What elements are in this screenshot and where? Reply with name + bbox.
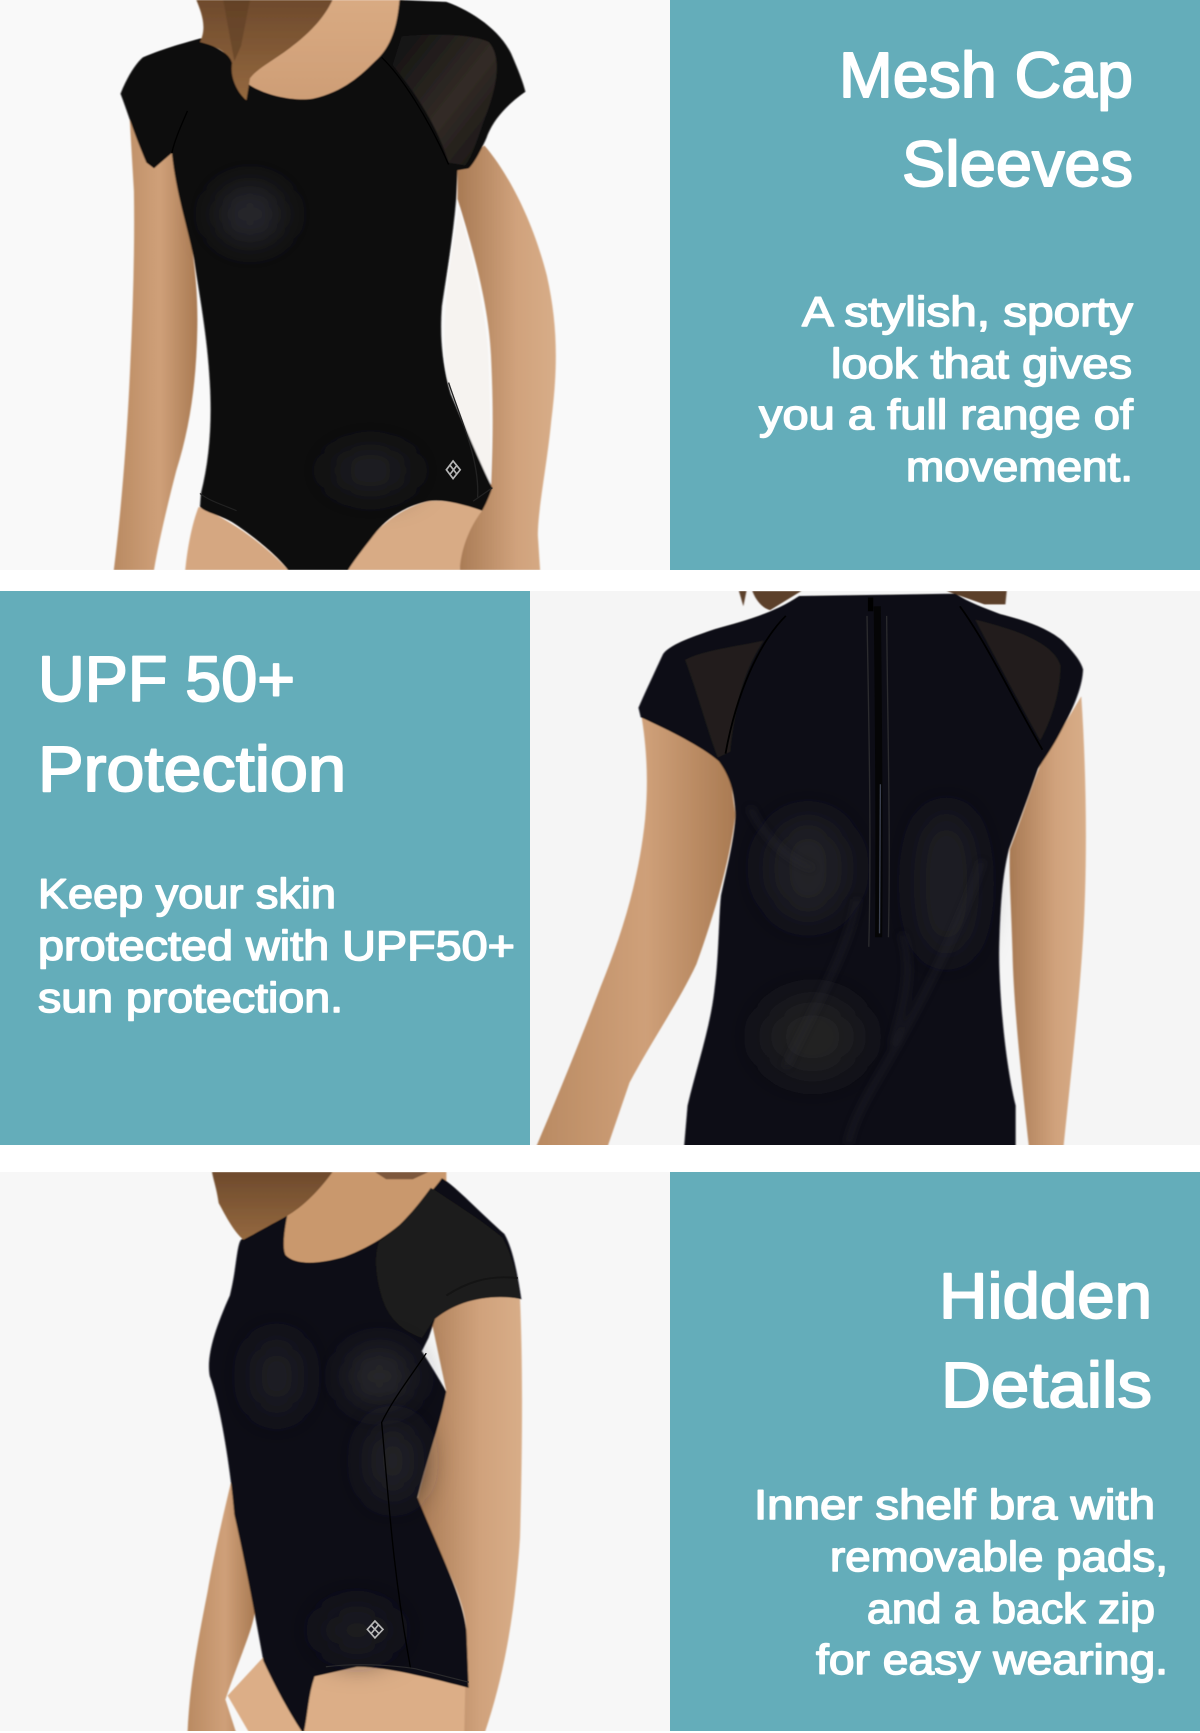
photo: side view of swimsuit <box>186 1172 524 1731</box>
description: Inner shelf bra with <box>754 1481 1155 1528</box>
photo: front view of swimsuit <box>112 0 558 570</box>
panel: UPF 50+ protection <box>0 591 530 1145</box>
left arm <box>536 712 735 1148</box>
description: look that gives <box>831 340 1132 387</box>
description: removable pads, <box>830 1533 1168 1580</box>
heading: Details <box>941 1349 1152 1421</box>
chest skin <box>219 0 404 115</box>
heading: Sleeves <box>902 128 1133 200</box>
swimsuit body <box>121 0 525 570</box>
description <box>754 1481 1168 1683</box>
hair <box>196 0 333 100</box>
thighs <box>185 507 288 570</box>
heading <box>939 1260 1152 1421</box>
hair <box>212 1172 333 1240</box>
description <box>759 288 1133 490</box>
panel background <box>670 1172 1200 1731</box>
back zip <box>867 598 889 947</box>
fabric highlights <box>763 807 973 1079</box>
heading: UPF 50+ <box>38 643 295 715</box>
right arm <box>1010 696 1086 1148</box>
heading <box>839 39 1133 200</box>
heading: Hidden <box>939 1260 1152 1332</box>
panel: mesh cap sleeves <box>670 0 1200 570</box>
mesh sleeve <box>393 35 497 165</box>
description <box>38 870 515 1021</box>
description: movement. <box>906 443 1133 490</box>
description: for easy wearing. <box>816 1636 1168 1683</box>
description: sun protection. <box>38 974 343 1021</box>
thigh <box>228 1657 478 1733</box>
seam lines and hem <box>172 57 492 511</box>
description: you a full range of <box>759 391 1133 438</box>
right arm and hand <box>458 145 556 570</box>
description: protected with UPF50+ <box>38 922 515 969</box>
logo diamond <box>367 1621 383 1638</box>
front arm <box>417 1295 522 1733</box>
logo diamond <box>446 461 460 479</box>
heading <box>38 643 346 805</box>
panel background <box>670 0 1200 570</box>
hair <box>739 591 1007 610</box>
mesh sleeve <box>376 1188 520 1338</box>
description: Keep your skin <box>38 870 336 917</box>
fabric folds <box>750 807 982 1144</box>
left mesh panel <box>685 641 763 757</box>
panel: hidden details <box>670 1172 1200 1731</box>
description: and a back zip <box>867 1585 1155 1632</box>
fabric highlights <box>254 1334 415 1657</box>
heading: Protection <box>38 733 346 805</box>
left arm <box>114 115 197 570</box>
fabric highlights <box>219 184 411 493</box>
swimsuit body <box>209 1178 521 1733</box>
seam lines <box>326 1277 518 1682</box>
description: A stylish, sporty <box>802 288 1133 335</box>
swimsuit back <box>638 594 1083 1148</box>
gap between body and right arm <box>444 207 491 486</box>
photo: back view with zip <box>530 591 1200 1145</box>
right mesh panel <box>975 620 1060 740</box>
neck and chest skin <box>272 1172 446 1276</box>
raglan seams <box>726 606 1042 754</box>
rear arm and hand <box>187 1469 255 1733</box>
panel background <box>0 591 530 1145</box>
heading: Mesh Cap <box>839 39 1133 111</box>
